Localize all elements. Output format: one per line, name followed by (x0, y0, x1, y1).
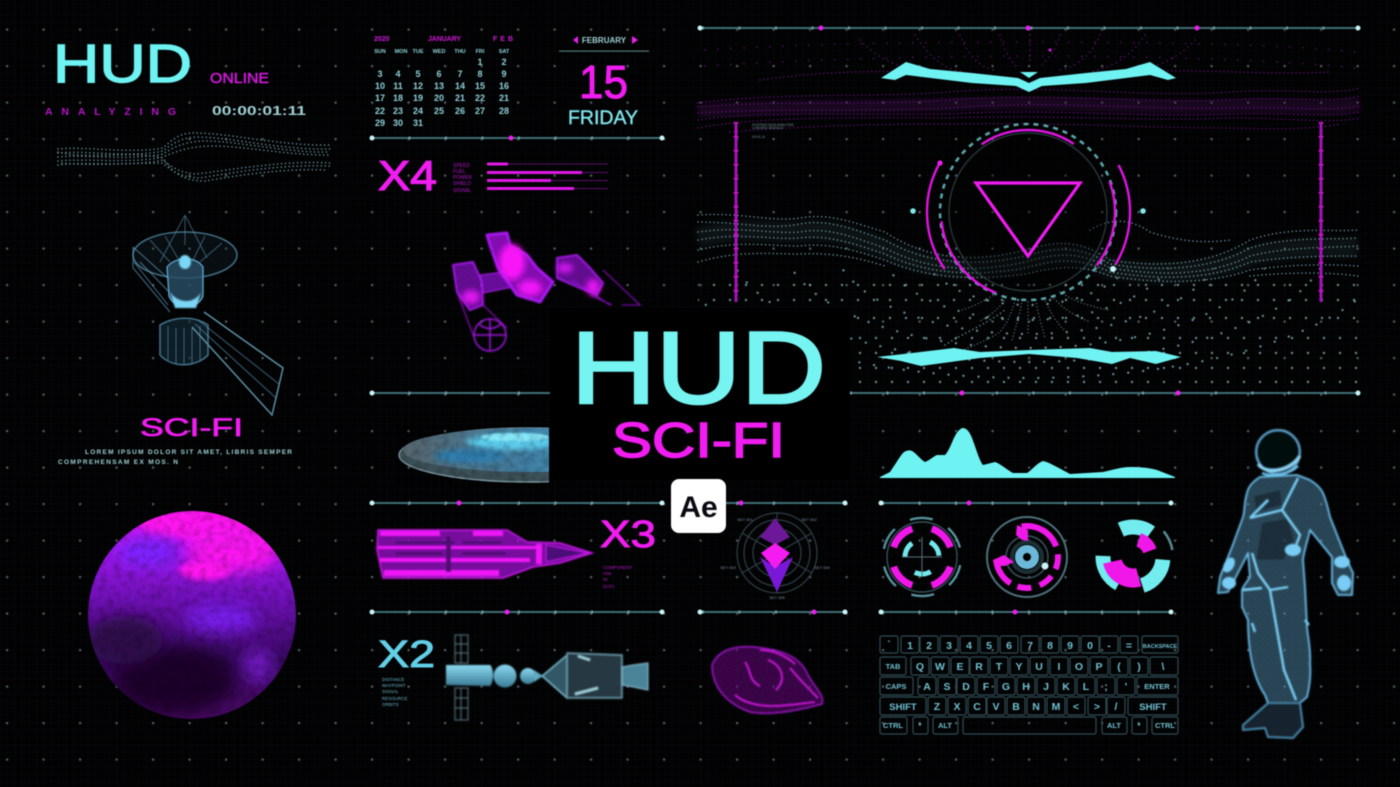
radar chart: SET 003 (720, 565, 737, 570)
keyboard row 5: CTRL (883, 721, 903, 730)
keyboard row 2: P (1095, 661, 1103, 673)
keyboard row 4: C (973, 701, 981, 713)
calendar grid: 10 (375, 81, 385, 91)
calendar grid: MON (395, 49, 407, 55)
keyboard row 1: 4 (966, 640, 972, 652)
gauge 3 (1077, 501, 1189, 613)
calendar grid: WED (433, 49, 445, 55)
keyboard row 4: B (1012, 701, 1020, 713)
keyboard row 4: SHIFT (889, 702, 917, 713)
calendar grid: TUE (412, 49, 424, 55)
left vertical bar (734, 122, 738, 302)
keyboard row 3: G (1002, 681, 1010, 693)
top bracket (881, 62, 1176, 92)
keyboard row 1: 7 (1027, 640, 1033, 652)
small HUD header block (45, 34, 306, 118)
subtitle: SCI-FI: SCI-FI (612, 414, 785, 468)
keyboard row 5 (880, 717, 1178, 734)
calendar grid: 19 (413, 93, 423, 103)
X2 tiny labels (382, 677, 408, 707)
X3 tiny labels (603, 565, 633, 589)
keyboard row 3: ; (1104, 681, 1108, 693)
keyboard row 2: I (1058, 661, 1061, 673)
keyboard row 5: * (1138, 721, 1141, 730)
grey dotted wave (698, 214, 1358, 281)
calendar grid: 23 (393, 106, 403, 116)
dark chest panels (1254, 490, 1294, 560)
keyboard row 5: CTRL (1155, 721, 1175, 730)
right vertical bar (1320, 122, 1322, 302)
tiny viewport note: LOADING MODULE (752, 126, 784, 130)
calendar grid (374, 49, 510, 128)
calendar grid: 21 (455, 93, 465, 103)
keyboard row 3: F (983, 681, 990, 693)
ship wires (457, 270, 640, 340)
calendar grid: 30 (393, 118, 403, 128)
X2 tiny labels: WAYPOINT (382, 683, 406, 688)
calendar (374, 36, 513, 128)
calendar grid: 2 (501, 57, 507, 67)
calendar grid: 13 (434, 81, 444, 91)
keyboard row 1: 1 (907, 640, 913, 652)
keyboard row 1: BACKSPACE (1143, 644, 1178, 650)
divider (370, 136, 664, 140)
aft ring (474, 319, 506, 351)
keyboard row 1: 2 (926, 640, 932, 652)
X4 multiplier: X4 (378, 152, 437, 199)
tiny viewport note (752, 123, 794, 139)
solar panels (455, 635, 468, 720)
calendar grid: 17 (375, 93, 385, 103)
HUD viewport panel (663, 35, 1393, 382)
calendar grid: 31 (413, 118, 423, 128)
X4 tiny labels: SHIELD (453, 181, 471, 187)
keyboard row 1: 3 (946, 640, 952, 652)
keyboard row 1: ` (887, 639, 891, 651)
X3 tiny labels: IN (603, 577, 608, 582)
month selector: FEBRUARY (582, 36, 627, 45)
keyboard row 2: E (956, 661, 964, 673)
calendar grid: 27 (475, 106, 485, 116)
keyboard row 2: \ (1162, 661, 1165, 673)
calendar grid: SAT (499, 49, 510, 55)
service module (567, 653, 622, 698)
status: ANALYZING: ANALYZING (45, 106, 176, 118)
lower cylinder (160, 318, 208, 365)
dotted waveform (58, 133, 330, 181)
docked spacecraft (446, 635, 648, 720)
After Effects badge: Ae (679, 491, 718, 524)
status: ONLINE: ONLINE (210, 70, 269, 87)
calendar header (374, 36, 513, 43)
keyboard row 3: CAPS (886, 682, 906, 691)
glove highlights (1221, 544, 1351, 591)
calendar grid: SUN (374, 49, 386, 55)
magenta spaceship wireframe (453, 233, 640, 351)
calendar header: JANUARY (428, 36, 461, 43)
keyboard row 3: K (1062, 681, 1070, 693)
satellite wireframe (133, 215, 283, 415)
calendar grid: 18 (393, 93, 403, 103)
asteroid (712, 647, 823, 713)
keyboard row 2: W (935, 661, 945, 673)
calendar grid: 24 (413, 106, 423, 116)
divider: viewport top (698, 26, 1360, 30)
keyboard row 2: TAB (886, 662, 901, 671)
keyboard row 2: T (996, 661, 1003, 673)
keyboard row 3 (880, 677, 1178, 695)
keyboard row 5: * (919, 721, 922, 730)
dish (133, 232, 237, 278)
keyboard row 2: ( (1117, 661, 1121, 673)
tiny viewport note: 00:01:11 (752, 135, 765, 139)
perspective floor dots (697, 267, 1358, 384)
radar chart: SET 005 (769, 595, 786, 600)
keyboard row 1: 6 (1006, 640, 1012, 652)
divider: viewport bottom (850, 390, 1360, 396)
calendar header: FEB (493, 36, 513, 43)
X2 tiny labels: RESOURCE (382, 696, 408, 701)
title: HUD: HUD (571, 311, 826, 425)
inverted triangle (976, 183, 1080, 256)
calendar grid: 22 (475, 93, 485, 103)
calendar grid: 9 (501, 69, 507, 79)
calendar grid: 16 (499, 81, 509, 91)
X4 tiny labels (453, 163, 472, 194)
calendar grid: THU (454, 49, 466, 55)
timer: 00:00:01:11 (212, 104, 306, 118)
radar chart (720, 513, 831, 600)
X4 bar chart (487, 162, 608, 190)
divider: row 2 middle (698, 500, 848, 506)
calendar grid: 28 (499, 106, 509, 116)
divider: row 2 right (878, 500, 1174, 506)
bottom bracket (877, 348, 1181, 366)
keyboard row 2: U (1035, 661, 1043, 673)
keyboard (880, 636, 1178, 734)
calendar grid: 14 (455, 81, 465, 91)
radar chart: SET 001 (737, 517, 754, 522)
After Effects badge (671, 479, 726, 533)
keyboard row 4: SHIFT (1139, 702, 1167, 713)
keyboard row 1 (880, 636, 1178, 653)
keyboard row 4: M (1052, 701, 1061, 713)
calendar grid: 12 (413, 81, 423, 91)
keyboard row 1: 0 (1087, 640, 1093, 652)
calendar grid: 11 (393, 81, 403, 91)
keyboard row 1: - (1107, 640, 1111, 652)
X2 tiny labels: ORBITS (382, 702, 399, 707)
calendar grid: 26 (455, 106, 465, 116)
keyboard row 5: ALT (1107, 721, 1121, 730)
keyboard row 1: 5 (986, 640, 992, 652)
keyboard row 4: / (1115, 701, 1118, 713)
calendar header: 2020 (374, 36, 390, 43)
harness highlights (1243, 478, 1309, 700)
keyboard row 2: Y (1015, 661, 1023, 673)
X3 tiny labels: DATA (603, 584, 614, 589)
body silhouette (1218, 475, 1353, 738)
date widget (559, 36, 649, 129)
purple dotted terrain (698, 35, 1360, 132)
keyboard row 2 (880, 657, 1178, 675)
calendar grid: 3 (377, 69, 383, 79)
divider: row 3 middle (698, 610, 848, 614)
lorem caption: LOREM IPSUM DOLOR SIT AMET, LIBRIS SEMPER (85, 449, 292, 456)
X4 tiny labels: SIGNAL (453, 188, 472, 194)
satellite body (167, 259, 203, 306)
cone (542, 655, 567, 698)
keyboard row 4: V (992, 701, 1000, 713)
keyboard row 4 (880, 697, 1178, 715)
X4 tiny labels: POWER (453, 175, 472, 181)
keyboard row 4: > (1094, 701, 1100, 713)
X2 multiplier: X2 (378, 634, 435, 676)
calendar grid: 8 (477, 69, 483, 79)
keyboard row 4: N (1032, 701, 1040, 713)
calendar grid: 25 (434, 106, 444, 116)
sub-heading: SCI-FI: SCI-FI (140, 414, 243, 442)
X3 tiny labels: COMPONENT (603, 565, 633, 570)
divider: row 3 right (878, 610, 1174, 614)
calendar grid: 21 (499, 93, 509, 103)
keyboard row 3: A (923, 681, 931, 693)
engine nozzle (622, 663, 648, 690)
keyboard row 1: 9 (1067, 640, 1073, 652)
keyboard row 3: ENTER (1144, 682, 1170, 691)
central title card (550, 308, 850, 480)
keyboard row 2: ) (1137, 661, 1141, 673)
weekday: FRIDAY (568, 108, 638, 129)
keyboard row 4: Z (934, 701, 941, 713)
top bracket notch (1020, 72, 1038, 78)
X2 tiny labels: DISTANCE (382, 677, 404, 682)
keyboard row 2: Q (916, 661, 924, 673)
calendar grid: 7 (457, 69, 463, 79)
radar chart: SET 002 (801, 517, 818, 522)
keyboard row 2: O (1075, 661, 1083, 673)
X4 tiny labels: SPEED (453, 163, 470, 169)
gauge 2 (983, 513, 1071, 601)
forward module (446, 665, 493, 686)
rocket (377, 530, 592, 578)
upper solar panel (133, 247, 172, 312)
keyboard row 3: H (1022, 681, 1030, 693)
calendar grid: 5 (415, 69, 421, 79)
keyboard row 4: < (1073, 701, 1079, 713)
keyboard row 3: ' (1125, 681, 1127, 693)
calendar grid: 6 (436, 69, 442, 79)
X3 tiny labels: HIM (603, 571, 612, 576)
planet (87, 511, 296, 719)
calendar grid: 20 (434, 93, 444, 103)
divider: row 2 left (370, 500, 664, 506)
targeting ring (888, 72, 1168, 352)
keyboard row 1: = (1126, 640, 1132, 652)
X3 multiplier: X3 (600, 514, 656, 556)
gauge 1 (876, 511, 968, 603)
date number: 15 (579, 56, 628, 108)
calendar grid: 29 (375, 118, 385, 128)
helmet (1256, 430, 1300, 474)
keyboard row 1: 8 (1047, 640, 1053, 652)
radar chart: SET 004 (814, 565, 831, 570)
tiny viewport note: SYSTEM DATA ANALYSIS (752, 123, 794, 127)
keyboard row 3: S (943, 681, 951, 693)
keyboard row 3: L (1083, 681, 1090, 693)
X2 tiny labels: SIGNAL (382, 689, 399, 694)
X4 tiny labels: FUEL (453, 169, 466, 175)
calendar grid: 1 (477, 57, 483, 67)
calendar grid: 4 (395, 69, 401, 79)
calendar grid: FRI (476, 49, 485, 55)
keyboard row 5: ALT (938, 721, 952, 730)
keyboard row 2: R (975, 661, 983, 673)
area chart (880, 428, 1175, 478)
lower solar panel (192, 312, 283, 415)
rays under ring (935, 292, 1108, 362)
boots (1243, 703, 1303, 738)
disc ship (398, 426, 550, 484)
calendar grid: 22 (375, 106, 385, 116)
divider: row 3 left (370, 610, 664, 614)
keyboard row 3: D (962, 681, 970, 693)
divider: left of title (370, 390, 550, 396)
lorem caption (58, 449, 292, 466)
keyboard row 3: J (1043, 681, 1049, 693)
lorem caption: COMPREHENSAM EX MOS. N (58, 459, 178, 466)
keyboard row 4: X (953, 701, 961, 713)
calendar grid: 15 (475, 81, 485, 91)
heading: HUD: HUD (53, 34, 192, 94)
astronaut wireframe (1218, 430, 1353, 738)
